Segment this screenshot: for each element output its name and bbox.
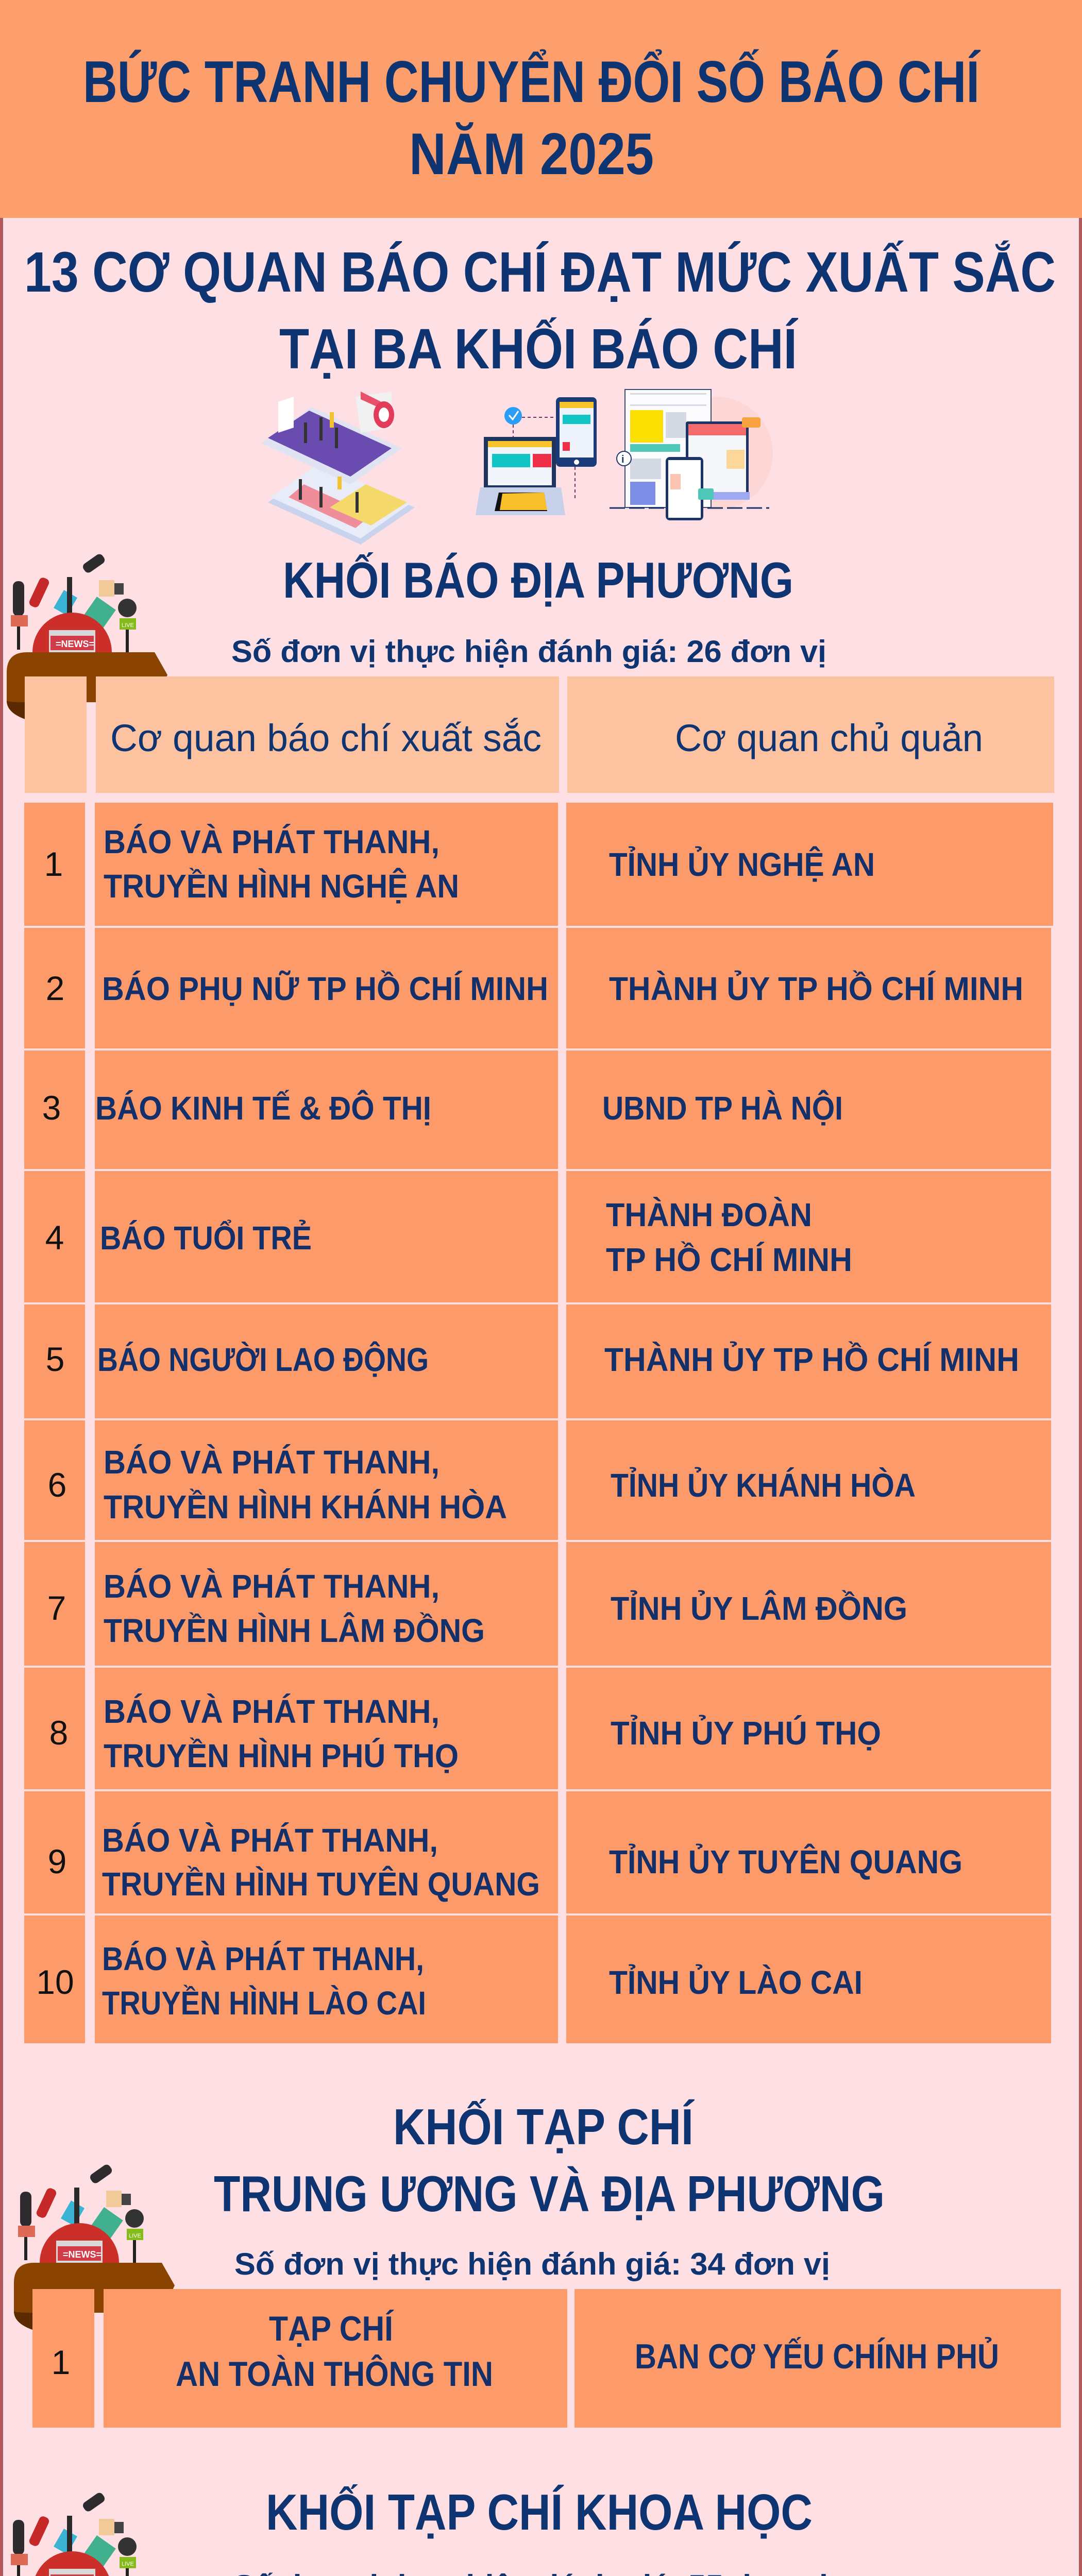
row texts: TRUYỀN HÌNH PHÚ THỌ [104,1737,459,1774]
icon: news podium 1: LIVE [122,622,134,629]
row texts: BÁO VÀ PHÁT THANH, [104,1568,439,1605]
icon: news podium 3: LIVE [122,2561,134,2567]
headline: 13 agencies: TẠI BA KHỐI BÁO CHÍ [279,317,798,381]
row texts: BÁO VÀ PHÁT THANH, [102,1822,438,1859]
icon: news podium 3 [7,2491,167,2576]
table: central & local magazines: AN TOÀN THÔNG TIN [176,2354,493,2394]
row texts: TRUYỀN HÌNH KHÁNH HÒA [104,1488,507,1526]
icon: news podium 1: =NEWS= [56,639,94,649]
row numbers: 8 [49,1714,68,1752]
icon: news podium 1 [7,552,167,720]
icon: laptop and phone [476,397,597,515]
row texts: BÁO VÀ PHÁT THANH, [104,823,439,860]
row texts: UBND TP HÀ NỘI [602,1089,843,1127]
table: central & local magazines: BAN CƠ YẾU CHÍNH PHỦ [635,2336,999,2376]
row numbers: 5 [46,1340,64,1378]
icon: newspaper, tablet, phone [610,389,773,520]
table: central & local magazines [32,2289,1061,2428]
title [83,49,981,187]
row texts: THÀNH ỦY TP HỒ CHÍ MINH [609,970,1023,1007]
row texts: TRUYỀN HÌNH TUYÊN QUANG [102,1865,540,1903]
row numbers [36,845,74,2001]
table: central & local magazines: TẠP CHÍ [269,2309,394,2348]
row texts: TRUYỀN HÌNH LÀO CAI [102,1985,426,2022]
section heading: Khối tạp chí khoa học [233,2484,828,2576]
headline: 13 agencies [24,241,1056,381]
row numbers: 9 [48,1842,66,1880]
subtitle: 26 units: Số đơn vị thực hiện đánh giá: 26 đơn vị [231,634,826,669]
row texts: BÁO PHỤ NỮ TP HỒ CHÍ MINH [102,970,548,1007]
section heading: Khối báo địa phương: KHỐI BÁO ĐỊA PHƯƠNG [283,552,793,608]
row texts: BÁO VÀ PHÁT THANH, [104,1693,439,1730]
row texts: BÁO NGƯỜI LAO ĐỘNG [97,1341,429,1378]
table header: Cơ quan báo chí xuất sắc [110,717,542,759]
row numbers: 7 [47,1589,66,1627]
row texts: TỈNH ỦY PHÚ THỌ [611,1714,881,1752]
row texts: BÁO TUỔI TRẺ [100,1219,312,1257]
icon: isometric phone with news crew [261,392,415,545]
row numbers: 1 [44,845,63,883]
row texts: TỈNH ỦY NGHỆ AN [609,845,875,883]
row texts: THÀNH ĐOÀN [606,1196,812,1233]
table header [25,676,1054,793]
row texts: TỈNH ỦY LÀO CAI [609,1963,863,2001]
table header: Cơ quan chủ quản [675,717,983,759]
section heading: Khối tạp chí trung ương và địa phương: TRUNG ƯƠNG VÀ ĐỊA PHƯƠNG [214,2165,885,2222]
row texts: BÁO VÀ PHÁT THANH, [102,1940,424,1977]
row texts: TỈNH ỦY LÂM ĐỒNG [611,1589,907,1627]
icon: news podium 2 [14,2163,175,2331]
row texts: THÀNH ỦY TP HỒ CHÍ MINH [604,1341,1019,1378]
subtitle: 34 units: Số đơn vị thực hiện đánh giá: 34 đơn vị [234,2247,830,2281]
row numbers: 6 [48,1466,66,1504]
section heading: Khối tạp chí trung ương và địa phương [214,2098,885,2281]
title: NĂM 2025 [409,122,654,187]
row texts: TỈNH ỦY KHÁNH HÒA [611,1466,916,1504]
header banner [0,0,1082,218]
row texts: TP HỒ CHÍ MINH [606,1241,852,1278]
row numbers: 4 [45,1218,64,1257]
row numbers: 2 [46,969,64,1007]
row texts: BÁO VÀ PHÁT THANH, [104,1444,439,1481]
section heading: Khối tạp chí trung ương và địa phương: KHỐI TẠP CHÍ [393,2098,695,2155]
row texts: BÁO KINH TẾ & ĐÔ THỊ [95,1089,431,1127]
icon: news podium 2: =NEWS= [63,2249,102,2260]
icon: newspaper, tablet, phone: i [621,454,624,465]
table: local press [24,676,1054,2043]
row texts: TRUYỀN HÌNH NGHỆ AN [104,867,459,905]
section heading: Khối báo địa phương [231,552,826,669]
row numbers: 3 [42,1089,61,1127]
row texts: TRUYỀN HÌNH LÂM ĐỒNG [104,1612,485,1649]
table: central & local magazines: 1 [52,2343,70,2381]
section heading: Khối tạp chí khoa học: KHỐI TẠP CHÍ KHOA HỌC [266,2484,813,2540]
icon: news podium 2: LIVE [129,2233,141,2239]
illustrations: digital media [261,389,773,545]
row numbers: 10 [36,1963,74,2001]
row texts: TỈNH ỦY TUYÊN QUANG [609,1843,962,1880]
row texts [95,823,1023,2022]
